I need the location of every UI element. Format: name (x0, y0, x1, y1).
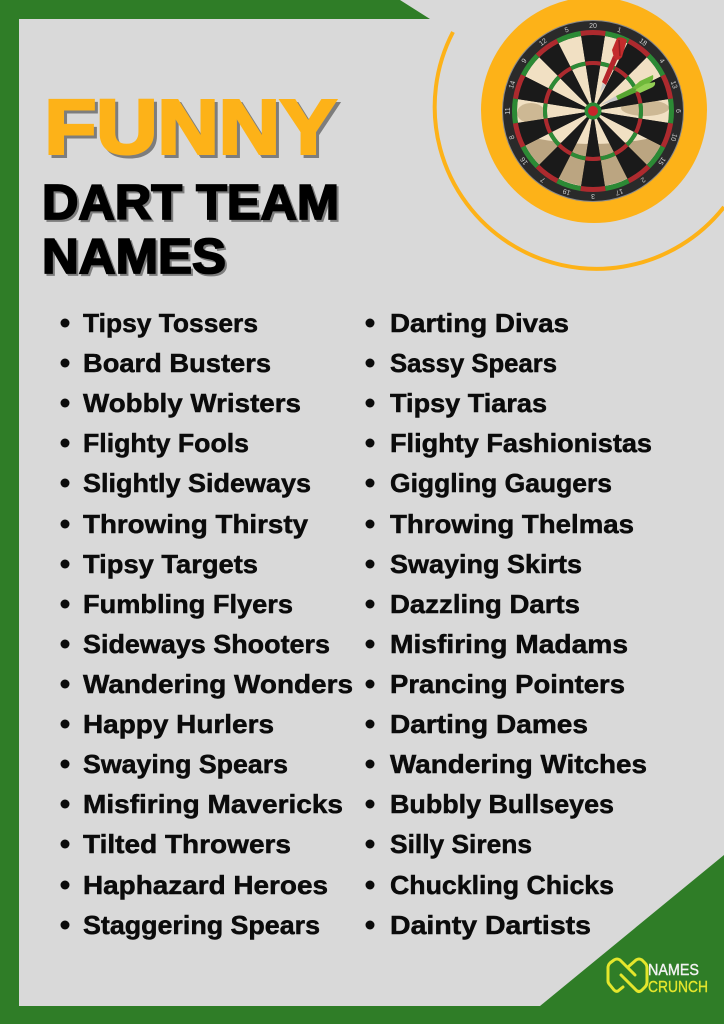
list: right column of names: Giggling Gaugers (390, 468, 612, 498)
list: right column of names: Prancing Pointers (390, 669, 625, 699)
icon: dartboard with orange disc: 13 (669, 80, 678, 90)
list: left column of names: Swaying Spears (83, 749, 288, 779)
icon: dartboard with orange disc: 15 (656, 155, 666, 166)
list: right column of names: Throwing Thelmas (390, 509, 634, 539)
list: right column of names: Darting Dames (390, 709, 588, 739)
list: left column of names: Wobbly Wristers (83, 388, 301, 418)
list: left column of names: Flighty Fools (83, 428, 249, 458)
icon: dartboard with orange disc: 3 (591, 192, 595, 199)
subtitle: DART TEAM: DART TEAM (44, 177, 341, 232)
icon: dartboard with orange disc: 6 (674, 109, 681, 113)
list: left column of names: Tipsy Targets (83, 549, 258, 579)
decorative orange arc (435, 32, 724, 269)
icon: dartboard with orange disc: 8 (509, 134, 517, 140)
icon: dartboard with orange disc: 4 (657, 58, 665, 65)
list: right column of names: Bubbly Bullseyes (390, 789, 614, 819)
list: left column of names: Staggering Spears (83, 910, 320, 940)
icon: dartboard with orange disc: 10 (669, 132, 678, 142)
list: right column of names: Dazzling Darts (390, 589, 580, 619)
icon: yellow N mark (608, 959, 647, 992)
list: right column of names: Wandering Witches (390, 749, 647, 779)
list: left column of names: Throwing Thirsty (83, 509, 309, 539)
logo: Names Crunch (608, 959, 708, 996)
list: right column of names: Silly Sirens (390, 829, 532, 859)
list: right column of names: Sassy Spears (390, 348, 557, 378)
list: left column of names: Fumbling Flyers (83, 589, 293, 619)
icon: dartboard with orange disc: 9 (521, 58, 529, 65)
icon: dartboard with orange disc: 14 (508, 80, 517, 90)
list: left column of names: Tilted Throwers (83, 829, 291, 859)
icon: dartboard with orange disc: 5 (564, 27, 570, 35)
list: right column of names: Swaying Skirts (390, 549, 582, 579)
subtitle: NAMES: NAMES (44, 231, 228, 286)
icon: green dart (600, 75, 655, 105)
icon: dartboard with orange disc: 17 (614, 187, 624, 196)
icon: dartboard with orange disc (481, 0, 707, 223)
list: left column of names: Tipsy Tossers (83, 308, 258, 338)
icon: dartboard with orange disc: 19 (562, 187, 572, 196)
list: left column of names (60, 308, 353, 940)
logo wordmark: NAMES: NAMES (648, 962, 699, 979)
list: right column of names: Dainty Dartists (390, 910, 591, 940)
list: right column of names: Tipsy Tiaras (390, 388, 547, 418)
list: right column of names (366, 308, 652, 940)
icon: dartboard with orange disc: 16 (519, 155, 530, 166)
subtitle: DART TEAM: DART TEAM (42, 175, 339, 230)
title: FUNNY: FUNNY (48, 88, 340, 174)
list: left column of names: Happy Hurlers (83, 709, 274, 739)
subtitle: NAMES: NAMES (42, 229, 226, 284)
title: FUNNY: FUNNY (44, 84, 336, 170)
list: left column of names: Slightly Sideways (83, 468, 311, 498)
list: left column of names: Misfiring Mavericks (83, 789, 343, 819)
icon: dartboard with orange disc: 7 (540, 175, 547, 183)
icon: red dart (600, 37, 627, 93)
icon: dartboard with orange disc: 2 (639, 175, 646, 183)
icon: dartboard with orange disc: 11 (505, 107, 512, 115)
icon: dartboard with orange disc: 12 (538, 37, 549, 48)
list: right column of names: Flighty Fashionistas (390, 428, 652, 458)
list: right column of names: Darting Divas (390, 308, 569, 338)
list: left column of names: Wandering Wonders (83, 669, 353, 699)
list: left column of names: Haphazard Heroes (83, 870, 328, 900)
list: left column of names: Board Busters (83, 348, 271, 378)
list: right column of names: Misfiring Madams (390, 629, 628, 659)
icon: dartboard with orange disc: 20 (589, 23, 597, 30)
list: left column of names: Sideways Shooters (83, 629, 330, 659)
icon: dartboard with orange disc: 18 (637, 38, 648, 48)
logo wordmark: CRUNCH: CRUNCH (648, 979, 708, 996)
list: right column of names: Chuckling Chicks (390, 870, 614, 900)
icon: dartboard with orange disc: 1 (616, 27, 622, 35)
